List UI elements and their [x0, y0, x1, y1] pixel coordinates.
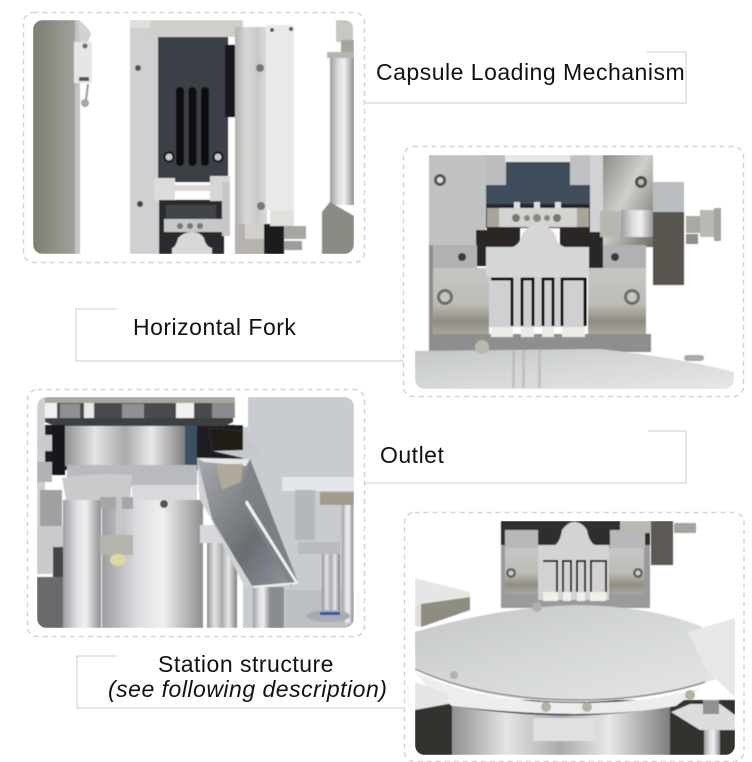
- central cylinder: [102, 500, 203, 628]
- right lower bracket: [671, 700, 735, 755]
- left side machinery: [37, 425, 65, 628]
- lower dark area: [159, 200, 224, 254]
- left grey column: [33, 20, 75, 254]
- lower base: [415, 700, 735, 755]
- centre tab: [533, 718, 596, 741]
- dark blue panel: [485, 161, 591, 205]
- fork tips: [491, 327, 585, 337]
- plate screws: [434, 174, 647, 188]
- top bar: [147, 20, 243, 37]
- label: horizontal fork: Horizontal Fork: [133, 314, 296, 340]
- panel: outlet photo: [28, 390, 364, 636]
- clamp block: [100, 497, 133, 566]
- label: station structure: Station structure: [158, 651, 334, 677]
- right plate: [235, 27, 267, 257]
- label: capsule loading mechanism: Capsule Loading Mechanism: [376, 59, 685, 85]
- turntable disk: [415, 349, 734, 389]
- panel screws: [164, 152, 224, 162]
- label: outlet: Outlet: [380, 442, 444, 468]
- support columns right of centre: [200, 525, 284, 628]
- side lower plates: [429, 245, 651, 352]
- fork head plate: [487, 202, 589, 227]
- left cap and column: [62, 474, 132, 628]
- right white cover: [688, 618, 735, 697]
- knob and block: [600, 182, 721, 285]
- plate bolts: [506, 568, 643, 578]
- panel: station structure photo: [404, 512, 744, 762]
- turret disk: [67, 465, 197, 487]
- right table and posts: [282, 477, 354, 623]
- top plate and posts: [45, 397, 235, 426]
- left block: [415, 578, 470, 627]
- turntable disk: [415, 605, 735, 714]
- knob block: [620, 521, 696, 565]
- connector: outlet: [365, 431, 686, 483]
- panel: capsule loading mechanism photo: [24, 12, 364, 262]
- fork slots: [543, 561, 606, 592]
- right cylinder: [322, 20, 354, 254]
- central left plate: [130, 20, 159, 254]
- connector: capsule loading mechanism: [365, 52, 686, 103]
- back plates: [429, 155, 486, 247]
- slots: [176, 87, 209, 166]
- knob assembly: [236, 210, 306, 254]
- clamp blocks and rod: [154, 176, 230, 236]
- connector: station structure: [77, 656, 404, 708]
- upper cylinder: [65, 426, 185, 466]
- outlet chute: [197, 458, 298, 588]
- dark pockets around fork: [476, 227, 603, 268]
- fork slots: [491, 279, 585, 326]
- fork tips: [543, 592, 606, 601]
- back plate assembly: [501, 521, 650, 608]
- left bracket: [74, 20, 92, 107]
- fork: [538, 522, 609, 600]
- plate bolts: [437, 253, 640, 305]
- left dark backdrop: [45, 425, 243, 470]
- dark slotted panel: [158, 36, 228, 182]
- hopper: [208, 428, 244, 458]
- panel: horizontal fork photo: [404, 146, 744, 396]
- fork body: [486, 224, 589, 277]
- left lower bracket: [415, 682, 448, 710]
- background wall: [243, 397, 354, 628]
- disk bolts: [450, 602, 695, 712]
- connector: horizontal fork: [76, 309, 403, 361]
- label: see following description: (see following description): [108, 676, 387, 702]
- fork head: [164, 219, 222, 254]
